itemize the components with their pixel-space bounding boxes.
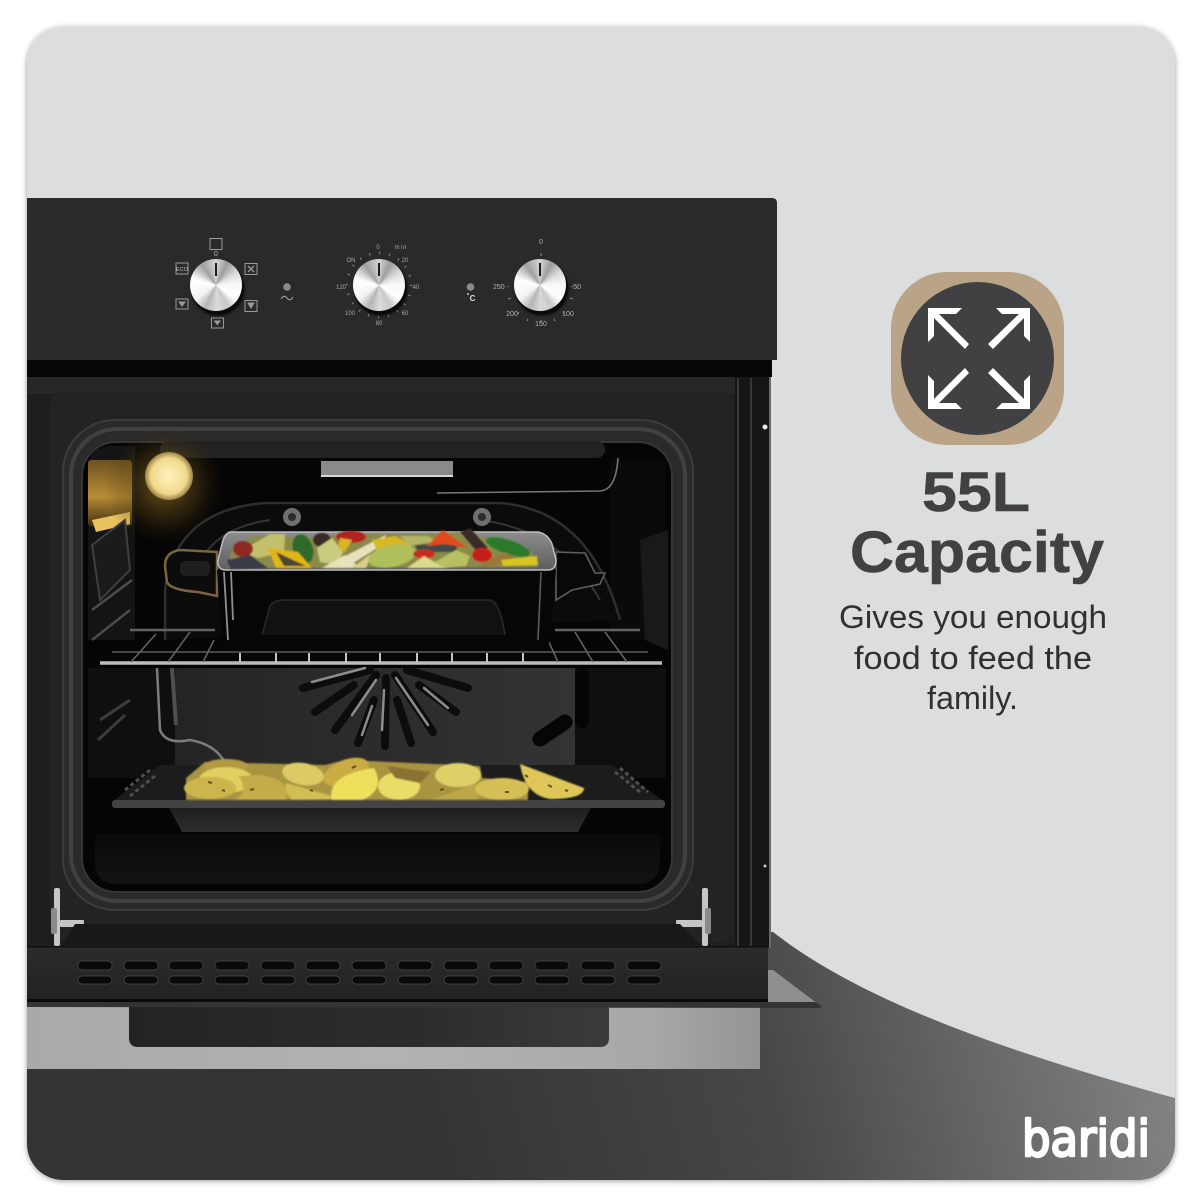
bottom of cavity: [95, 851, 660, 884]
thermostat scale: -50: [571, 284, 581, 291]
dish handles: [165, 550, 605, 600]
body text: [839, 599, 1107, 716]
top bracket: [321, 461, 453, 475]
thermostat scale: 0: [539, 239, 543, 246]
lower baking tray with potatoes: [112, 752, 665, 832]
thermostat scale: [493, 239, 581, 328]
vent slots: [78, 961, 661, 984]
stainless steel strip: [27, 1007, 760, 1069]
timer scale: min: [395, 245, 407, 251]
roasting dish with vegetables: [165, 528, 605, 650]
dark band under control panel: [27, 360, 772, 377]
timer scale: 60: [402, 311, 409, 317]
power indicator: [281, 283, 293, 300]
oven rack: [100, 630, 662, 663]
oven cavity frame: [63, 420, 693, 910]
heading: 55L: [922, 460, 1030, 523]
panel: floor and oven: [27, 198, 1175, 1180]
potato wedges: [184, 752, 584, 800]
icon: oven lamp with glow: [110, 441, 215, 536]
door vent band: [27, 946, 768, 1002]
function labels: ECO: [176, 267, 189, 273]
timer scale: 100: [345, 311, 356, 317]
glass edge: [27, 1002, 822, 1008]
timer scale: 20: [402, 258, 409, 264]
body text: food to feed the: [854, 640, 1092, 676]
fan cover vents: [303, 668, 468, 746]
logo: baridi: [1022, 1110, 1150, 1168]
door hinges: [51, 888, 711, 946]
knob: timer: [353, 259, 405, 311]
dark floor surface: [27, 932, 1175, 1180]
thermostat scale: 150: [535, 321, 547, 328]
expand arrows: [928, 308, 1030, 409]
heading: [850, 460, 1104, 585]
dish rim: [218, 532, 556, 570]
glass door reflection: [768, 970, 822, 1007]
heading: Capacity: [850, 520, 1104, 585]
wire element: [437, 458, 618, 493]
thermostat indicator: [467, 283, 476, 303]
body text: Gives you enough: [839, 599, 1107, 635]
timer scale: 80: [376, 321, 383, 327]
potato specks: [208, 766, 568, 792]
screws: [283, 508, 301, 526]
timer scale: [336, 245, 420, 327]
knob: thermostat: [514, 259, 566, 311]
function labels: [176, 251, 218, 271]
upper chamber interior: [88, 441, 668, 650]
function selector symbols: [176, 238, 257, 328]
timer scale: 120: [336, 285, 347, 291]
inner door ledge: [64, 924, 697, 942]
function labels: 0: [214, 251, 218, 258]
oven body: [27, 376, 771, 948]
badge circle: [901, 282, 1054, 435]
thermostat indicator: C: [470, 294, 476, 303]
body text: family.: [927, 680, 1018, 716]
tray body: [168, 806, 592, 832]
tray rim: [112, 800, 665, 808]
tray bed: [112, 765, 665, 802]
timer scale: 0: [376, 245, 380, 251]
runner perforations: [125, 768, 648, 796]
thermostat scale: 100: [562, 311, 574, 318]
knob: function selector: [190, 259, 242, 311]
arch of the rear wall: [165, 503, 620, 640]
timer scale: ON: [346, 258, 356, 264]
icon: capacity badge: [891, 272, 1064, 445]
thermostat scale: 200: [506, 311, 518, 318]
timer scale: 40: [413, 285, 420, 291]
lower chamber back wall: [88, 668, 666, 780]
vegetables: [227, 528, 538, 572]
dish body: [217, 570, 556, 650]
badge background: [891, 272, 1064, 445]
door handle: [129, 1006, 609, 1047]
thermostat scale: 250 -: [493, 284, 510, 291]
control panel: [27, 198, 777, 360]
